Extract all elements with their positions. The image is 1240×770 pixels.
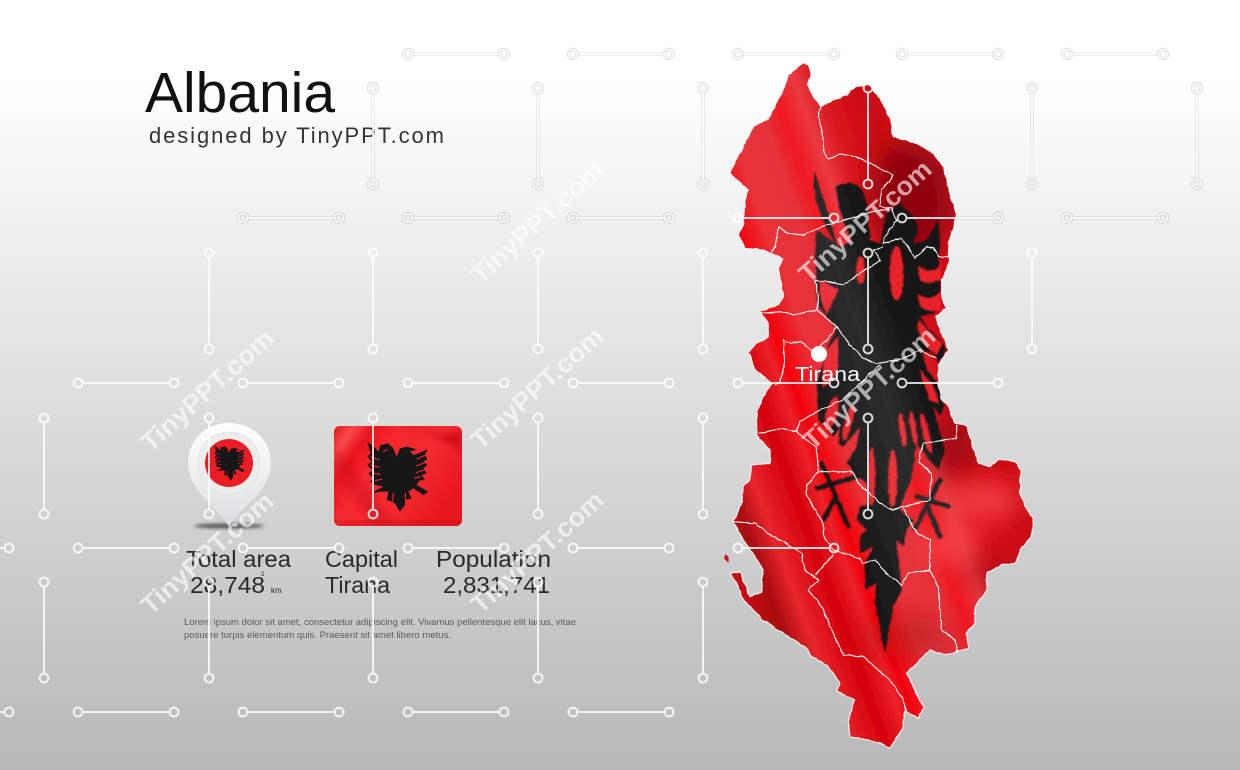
stat: population: Population <box>436 546 551 572</box>
pin inner ring <box>198 432 260 494</box>
stat: total area <box>186 546 291 598</box>
sheen on flag <box>734 73 988 717</box>
pin flag disc <box>205 439 253 487</box>
small island <box>725 554 729 563</box>
map artwork <box>717 50 1050 757</box>
region borders <box>733 107 957 712</box>
description text: Lorem ipsum dolor sit amet, consectetur adipiscing elit. Vivamus pellentesque elit lacus, vitae <box>184 617 576 628</box>
stat: total area: 2 <box>261 572 265 578</box>
subtitle: designed by TinyPPT.com <box>149 123 444 148</box>
stat: capital <box>325 546 398 598</box>
watermarks: TinyPPT.com <box>135 323 279 457</box>
pin body <box>188 423 271 527</box>
map of Albania with flag texture <box>717 50 1050 757</box>
red feather cut-outs <box>820 247 942 507</box>
watermarks: TinyPPT.com <box>465 321 609 455</box>
pin shadow <box>194 523 264 529</box>
description text: posuere turpis elementum quis. Praesent sit amet libero metus. <box>184 630 451 641</box>
stat: capital: Tirana <box>325 572 390 598</box>
title: Albania <box>145 61 335 125</box>
stat: capital: Capital <box>325 546 398 572</box>
capital dot <box>811 346 827 362</box>
stat: total area: 28,748 <box>190 572 265 598</box>
watermarks: TinyPPT.com <box>135 486 279 620</box>
map fill: waving flag <box>730 62 1033 748</box>
stat: population <box>436 546 551 598</box>
stat: population: 2,831,741 <box>443 572 550 598</box>
capital label: Tirana <box>795 364 861 386</box>
stat: total area: km <box>271 586 282 595</box>
watermarks: TinyPPT.com <box>465 485 609 619</box>
icon: location pin with flag <box>188 423 271 529</box>
stat: total area: Total area <box>186 546 291 572</box>
watermarks: TinyPPT.com <box>797 321 941 455</box>
watermarks: TinyPPT.com <box>793 154 937 288</box>
watermarks: TinyPPT.com <box>465 155 609 289</box>
description text <box>184 617 576 641</box>
watermarks <box>135 154 941 620</box>
icon: waving flag of Albania <box>334 426 462 526</box>
eagle emblem <box>814 172 948 653</box>
map outline <box>729 63 1033 748</box>
capital marker: Tirana <box>795 346 861 386</box>
crossed keys <box>817 463 948 537</box>
